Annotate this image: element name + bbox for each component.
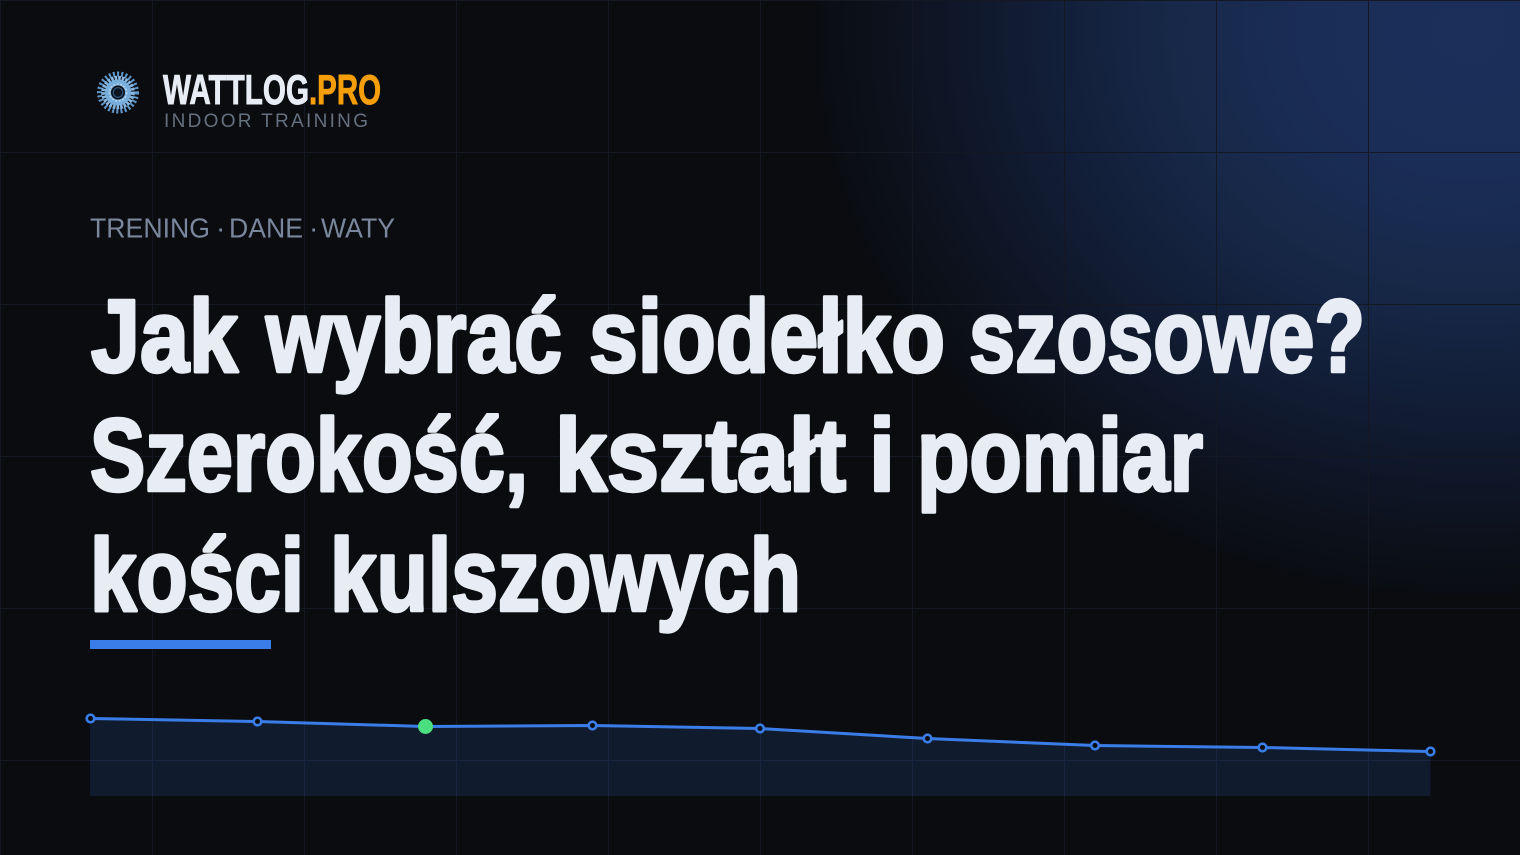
eyebrow: TRENING (90, 212, 210, 244)
eyebrow: · (309, 212, 318, 244)
line chart (87, 715, 1434, 796)
icon: cassette gear (100, 74, 136, 111)
title line 1: wybrać (265, 278, 562, 394)
highlighted point (418, 719, 433, 734)
chart points (87, 715, 1434, 755)
eyebrow: · (216, 212, 225, 244)
title line 2: Szerokość, (90, 398, 528, 512)
title line 2: i (869, 398, 895, 512)
title line 1: szosowe? (969, 278, 1365, 394)
wordmark: WATTLOG (163, 66, 309, 113)
accent underline (90, 640, 271, 649)
title line 2 (90, 398, 1203, 512)
chart line (90, 718, 1430, 752)
title (90, 278, 1365, 632)
title line 2: pomiar (917, 398, 1203, 512)
logo (100, 66, 381, 132)
tagline: INDOOR TRAINING (164, 111, 368, 132)
chart area (90, 718, 1430, 796)
eyebrow: DANE (229, 212, 303, 244)
eyebrow (90, 212, 395, 244)
title line 1: siodełko (589, 278, 945, 394)
title line 1: Jak (91, 278, 239, 394)
wordmark: .PRO (309, 66, 381, 113)
title line 3: kulszowych (330, 518, 801, 632)
title line 3: kości (90, 518, 304, 632)
eyebrow: WATY (321, 212, 395, 244)
title line 2: kształt (555, 398, 846, 512)
title line 3 (90, 518, 801, 632)
title line 1 (91, 278, 1365, 394)
